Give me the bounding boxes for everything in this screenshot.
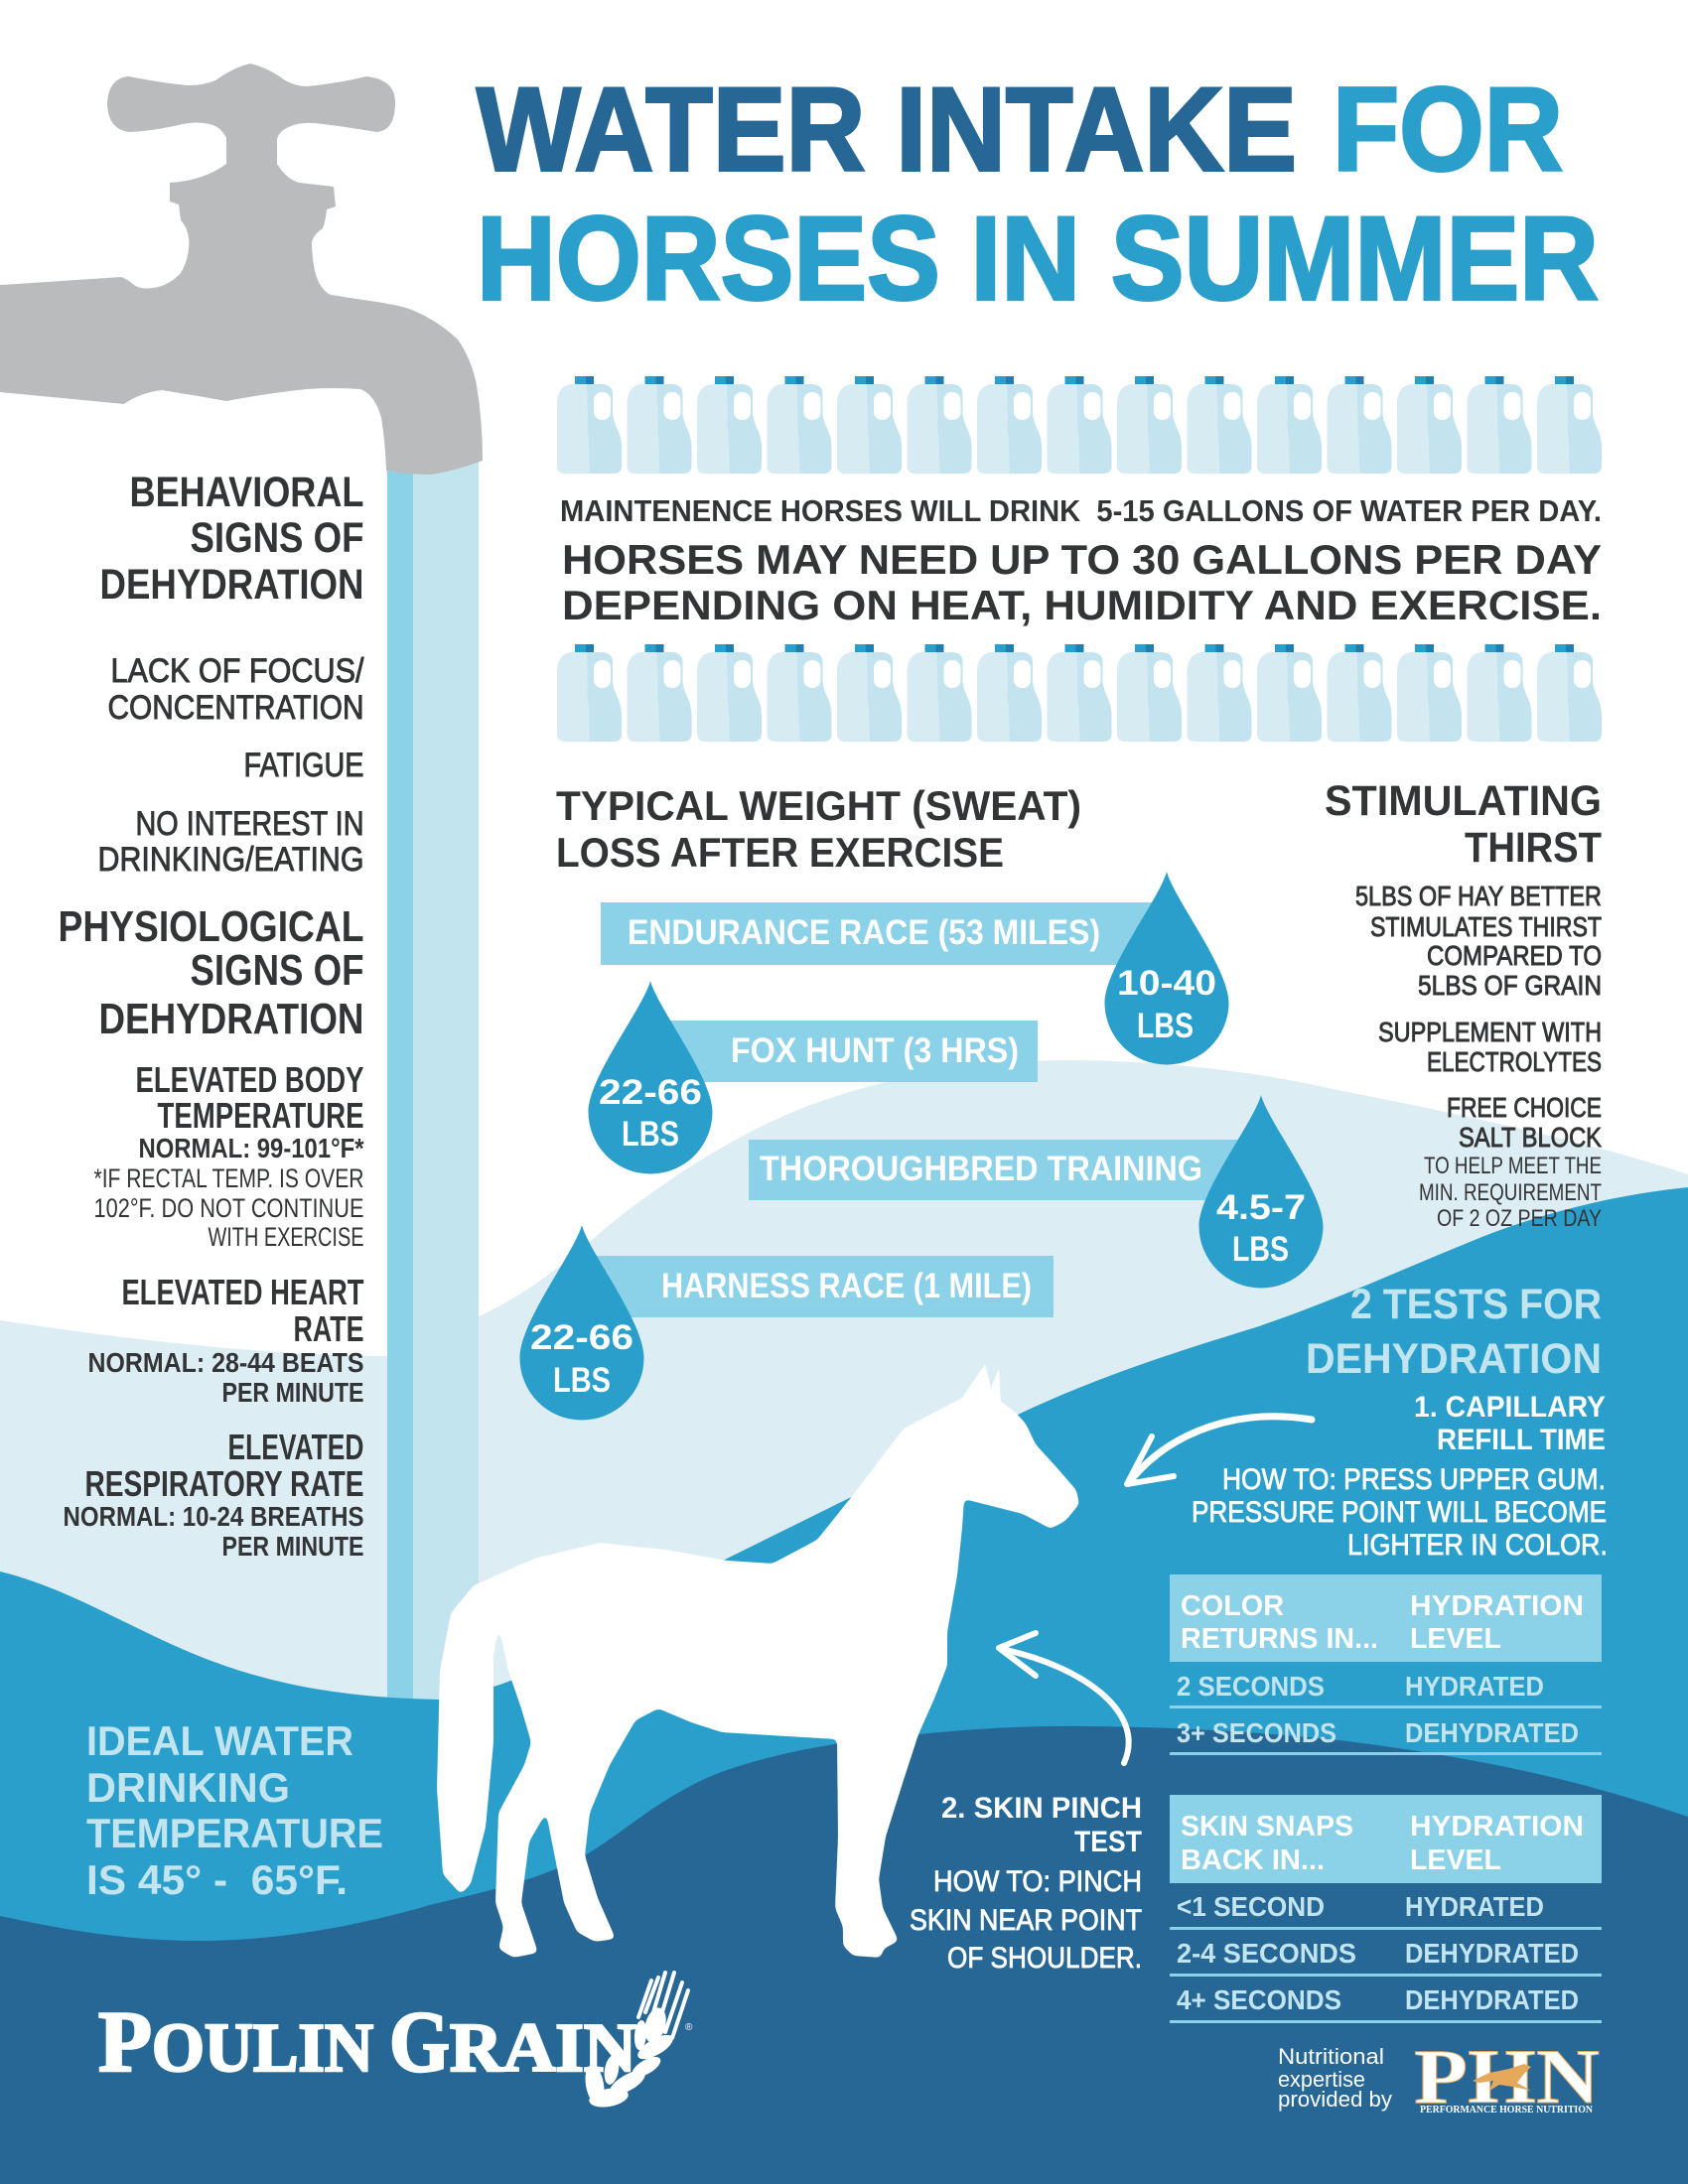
elevated body temperature: TEMPERATURE — [157, 1095, 363, 1136]
credit: nutritional expertise: Nutritional — [1278, 2044, 1384, 2069]
heading: behavioral signs of dehydration: BEHAVIORAL — [129, 469, 363, 516]
arrow: to gum — [1127, 1417, 1312, 1484]
drop: 4.5-7 lbs — [1199, 1095, 1323, 1289]
bar: endurance race — [601, 902, 1172, 965]
elevated body temperature: 102°F. DO NOT CONTINUE — [93, 1193, 363, 1223]
heading: stimulating thirst: THIRST — [1465, 824, 1602, 872]
table: capillary refill — [1170, 1574, 1602, 1755]
test 1: capillary refill time: PRESSURE POINT WILL BECOME — [1192, 1496, 1607, 1529]
drop: 22-66 lbs fox hunt — [588, 981, 713, 1173]
panel: physiological signs — [58, 902, 364, 1562]
water quantity statement — [560, 493, 1602, 628]
ideal water drinking temperature: DRINKING — [86, 1764, 290, 1811]
elevated body temperature: *IF RECTAL TEMP. IS OVER — [93, 1163, 363, 1193]
heading: stimulating thirst: STIMULATING — [1325, 777, 1602, 825]
tip: salt block: TO HELP MEET THE — [1424, 1153, 1602, 1179]
heading: typical weight loss: LOSS AFTER EXERCISE — [556, 829, 1004, 876]
table: skin pinch: SKIN SNAPS — [1181, 1811, 1353, 1843]
bar: thoroughbred training — [749, 1140, 1255, 1200]
elevated respiratory rate: NORMAL: 10-24 BREATHS — [64, 1501, 363, 1532]
heading: behavioral signs of dehydration: DEHYDRATION — [99, 561, 363, 609]
icon: wheat ear — [583, 1973, 693, 2110]
panel: behavioral signs — [97, 469, 364, 879]
wordmark: OULIN — [152, 2010, 373, 2087]
credit: nutritional expertise — [1278, 2044, 1392, 2112]
table: capillary refill: HYDRATION — [1410, 1590, 1584, 1622]
behavioral signs list: FATIGUE — [244, 747, 363, 784]
title: FOR — [1333, 64, 1563, 197]
test 1: capillary refill time: LIGHTER IN COLOR. — [1347, 1529, 1608, 1562]
test 1: capillary refill time: REFILL TIME — [1437, 1424, 1606, 1456]
heading: physiological signs of dehydration — [58, 902, 363, 1043]
heading: stimulating thirst — [1325, 777, 1602, 872]
tip: salt block: MIN. REQUIREMENT — [1419, 1179, 1602, 1206]
table: skin pinch: DEHYDRATED — [1405, 1984, 1579, 2015]
water jugs: top row — [557, 376, 1602, 474]
table: capillary refill: DEHYDRATED — [1405, 1717, 1579, 1748]
bar: thoroughbred training: THOROUGHBRED TRAINING — [760, 1150, 1202, 1188]
water quantity statement: MAINTENENCE HORSES WILL DRINK 5-15 GALLONS OF WATER PER DAY. — [560, 493, 1602, 528]
elevated respiratory rate — [64, 1427, 363, 1562]
icon: wheat ear: ® — [685, 2022, 693, 2033]
table: capillary refill: COLOR — [1181, 1590, 1284, 1622]
drop: 22-66 lbs fox hunt: LBS — [622, 1115, 679, 1154]
table: capillary refill: RETURNS IN... — [1181, 1623, 1378, 1655]
title: WATER INTAKE — [477, 64, 1297, 197]
mid blue hill — [0, 1187, 1688, 2184]
heading: behavioral signs of dehydration: SIGNS OF — [191, 514, 363, 562]
water jugs: bottom row — [557, 644, 1602, 742]
elevated heart rate: PER MINUTE — [222, 1377, 363, 1408]
panel: stimulating thirst — [1325, 777, 1602, 1232]
wordmark: G — [389, 1994, 450, 2091]
elevated heart rate: RATE — [294, 1308, 363, 1349]
bar: fox hunt — [645, 1021, 1038, 1082]
icon: galloping horse — [1473, 2064, 1531, 2091]
elevated heart rate: ELEVATED HEART — [121, 1272, 363, 1312]
elevated heart rate — [87, 1272, 363, 1408]
tip: salt block: OF 2 OZ PER DAY — [1437, 1205, 1602, 1232]
title — [477, 64, 1599, 326]
table: capillary refill: 3+ SECONDS — [1177, 1717, 1336, 1748]
table: capillary refill: LEVEL — [1410, 1623, 1501, 1655]
behavioral signs list — [97, 652, 364, 879]
horse ears — [962, 1364, 1001, 1403]
table: skin pinch — [1170, 1795, 1602, 2023]
drop: 22-66 lbs harness race — [520, 1225, 643, 1420]
wordmark: RAIN — [450, 2010, 636, 2087]
heading: 2 tests for dehydration: DEHYDRATION — [1306, 1335, 1602, 1383]
table: capillary refill: HYDRATED — [1405, 1671, 1544, 1702]
tip: hay: 5LBS OF HAY BETTER — [1355, 881, 1602, 911]
elevated respiratory rate: RESPIRATORY RATE — [85, 1463, 363, 1504]
heading: physiological signs of dehydration: SIGNS OF — [191, 946, 363, 995]
test 2: skin pinch — [910, 1792, 1142, 1975]
horse silhouette — [437, 1364, 1079, 1958]
tip: salt block — [1419, 1092, 1602, 1232]
tip: hay: STIMULATES THIRST — [1370, 911, 1602, 942]
credit: nutritional expertise: provided by — [1278, 2087, 1392, 2112]
ideal water drinking temperature: IS 45° - 65°F. — [86, 1856, 348, 1903]
drop: 22-66 lbs fox hunt: 22-66 — [599, 1073, 702, 1112]
ideal water drinking temperature — [86, 1717, 383, 1903]
tip: electrolytes: SUPPLEMENT WITH — [1378, 1017, 1602, 1047]
logo: Performance Horse Nutrition: PHN — [1414, 2033, 1600, 2119]
elevated body temperature: ELEVATED BODY — [135, 1059, 363, 1100]
table: capillary refill: 2 SECONDS — [1177, 1671, 1325, 1702]
drop: 4.5-7 lbs: 4.5-7 — [1216, 1188, 1306, 1227]
elevated body temperature — [93, 1059, 364, 1252]
test 1: capillary refill time — [1192, 1391, 1608, 1562]
table: skin pinch: 4+ SECONDS — [1177, 1984, 1341, 2015]
elevated respiratory rate: PER MINUTE — [222, 1531, 363, 1562]
heading: typical weight loss — [556, 782, 1081, 876]
heading: physiological signs of dehydration: DEHYDRATION — [99, 995, 363, 1043]
bar: harness race: HARNESS RACE (1 MILE) — [661, 1267, 1032, 1305]
bar: endurance race: ENDURANCE RACE (53 MILES) — [628, 913, 1100, 952]
table: skin pinch: HYDRATED — [1405, 1891, 1544, 1922]
test 2: skin pinch: TEST — [1074, 1826, 1142, 1858]
water quantity statement: DEPENDING ON HEAT, HUMIDITY AND EXERCISE. — [562, 582, 1602, 628]
tip: salt block: FREE CHOICE — [1447, 1092, 1602, 1123]
elevated respiratory rate: ELEVATED — [228, 1427, 363, 1467]
heading: typical weight loss: TYPICAL WEIGHT (SWEAT) — [556, 782, 1081, 829]
behavioral signs list: LACK OF FOCUS/ — [111, 652, 364, 690]
heading: 2 tests for dehydration: 2 TESTS FOR — [1350, 1281, 1602, 1328]
table: skin pinch: BACK IN... — [1181, 1844, 1325, 1876]
water quantity statement: HORSES MAY NEED UP TO 30 GALLONS PER DAY — [562, 536, 1602, 583]
title: HORSES IN SUMMER — [477, 193, 1599, 326]
tip: salt block: SALT BLOCK — [1459, 1122, 1602, 1153]
wordmark — [98, 1994, 636, 2091]
elevated body temperature: WITH EXERCISE — [209, 1222, 363, 1252]
test 2: skin pinch: HOW TO: PINCH — [933, 1865, 1142, 1898]
tip: electrolytes: ELECTROLYTES — [1427, 1046, 1602, 1077]
behavioral signs list: DRINKING/EATING — [97, 841, 363, 879]
logo: Poulin Grain — [98, 1973, 693, 2110]
drop: 10-40 lbs: LBS — [1137, 1007, 1194, 1045]
table: skin pinch: 2-4 SECONDS — [1177, 1938, 1356, 1969]
test 1: capillary refill time: 1. CAPILLARY — [1414, 1391, 1606, 1424]
heading: behavioral signs of dehydration — [99, 469, 363, 609]
ideal water drinking temperature: TEMPERATURE — [86, 1810, 383, 1856]
table: skin pinch: HYDRATION — [1410, 1811, 1584, 1843]
bar: fox hunt: FOX HUNT (3 HRS) — [731, 1031, 1019, 1070]
panel: tests for dehydration — [910, 1281, 1608, 2023]
test 2: skin pinch: 2. SKIN PINCH — [941, 1792, 1142, 1825]
drop: 4.5-7 lbs: LBS — [1232, 1230, 1289, 1269]
dark blue hill — [0, 1726, 1688, 2184]
behavioral signs list: NO INTEREST IN — [135, 805, 363, 843]
tip: electrolytes — [1378, 1017, 1602, 1077]
tip: hay — [1355, 881, 1602, 1001]
heading: 2 tests for dehydration — [1306, 1281, 1602, 1383]
behavioral signs list: CONCENTRATION — [107, 689, 363, 727]
drop: 10-40 lbs: 10-40 — [1117, 964, 1216, 1003]
heading: physiological signs of dehydration: PHYSIOLOGICAL — [58, 902, 363, 951]
elevated body temperature: NORMAL: 99-101°F* — [139, 1133, 364, 1163]
tip: hay: COMPARED TO — [1427, 940, 1602, 971]
drop: 10-40 lbs — [1104, 872, 1229, 1064]
faucet — [0, 64, 483, 475]
bar: harness race — [586, 1256, 1054, 1317]
logo: Performance Horse Nutrition: PERFORMANCE HORSE NUTRITION — [1420, 2104, 1593, 2116]
test 2: skin pinch: SKIN NEAR POINT — [910, 1904, 1142, 1937]
table: skin pinch: DEHYDRATED — [1405, 1938, 1579, 1969]
drop: 22-66 lbs harness race: LBS — [553, 1361, 611, 1400]
test 1: capillary refill time: HOW TO: PRESS UPPER GUM. — [1222, 1463, 1606, 1496]
table: skin pinch: LEVEL — [1410, 1844, 1501, 1876]
test 2: skin pinch: OF SHOULDER. — [947, 1942, 1142, 1975]
elevated heart rate: NORMAL: 28-44 BEATS — [87, 1347, 363, 1378]
table: skin pinch: <1 SECOND — [1177, 1891, 1325, 1922]
tip: hay: 5LBS OF GRAIN — [1418, 970, 1602, 1001]
ideal water drinking temperature: IDEAL WATER — [86, 1717, 353, 1764]
water stream — [387, 462, 479, 1703]
drop: 22-66 lbs harness race: 22-66 — [530, 1318, 633, 1357]
background: pale hill — [0, 1060, 1688, 2184]
wordmark: P — [98, 1994, 152, 2091]
credit: nutritional expertise: expertise — [1278, 2067, 1365, 2092]
arrow: to shoulder — [999, 1633, 1129, 1763]
